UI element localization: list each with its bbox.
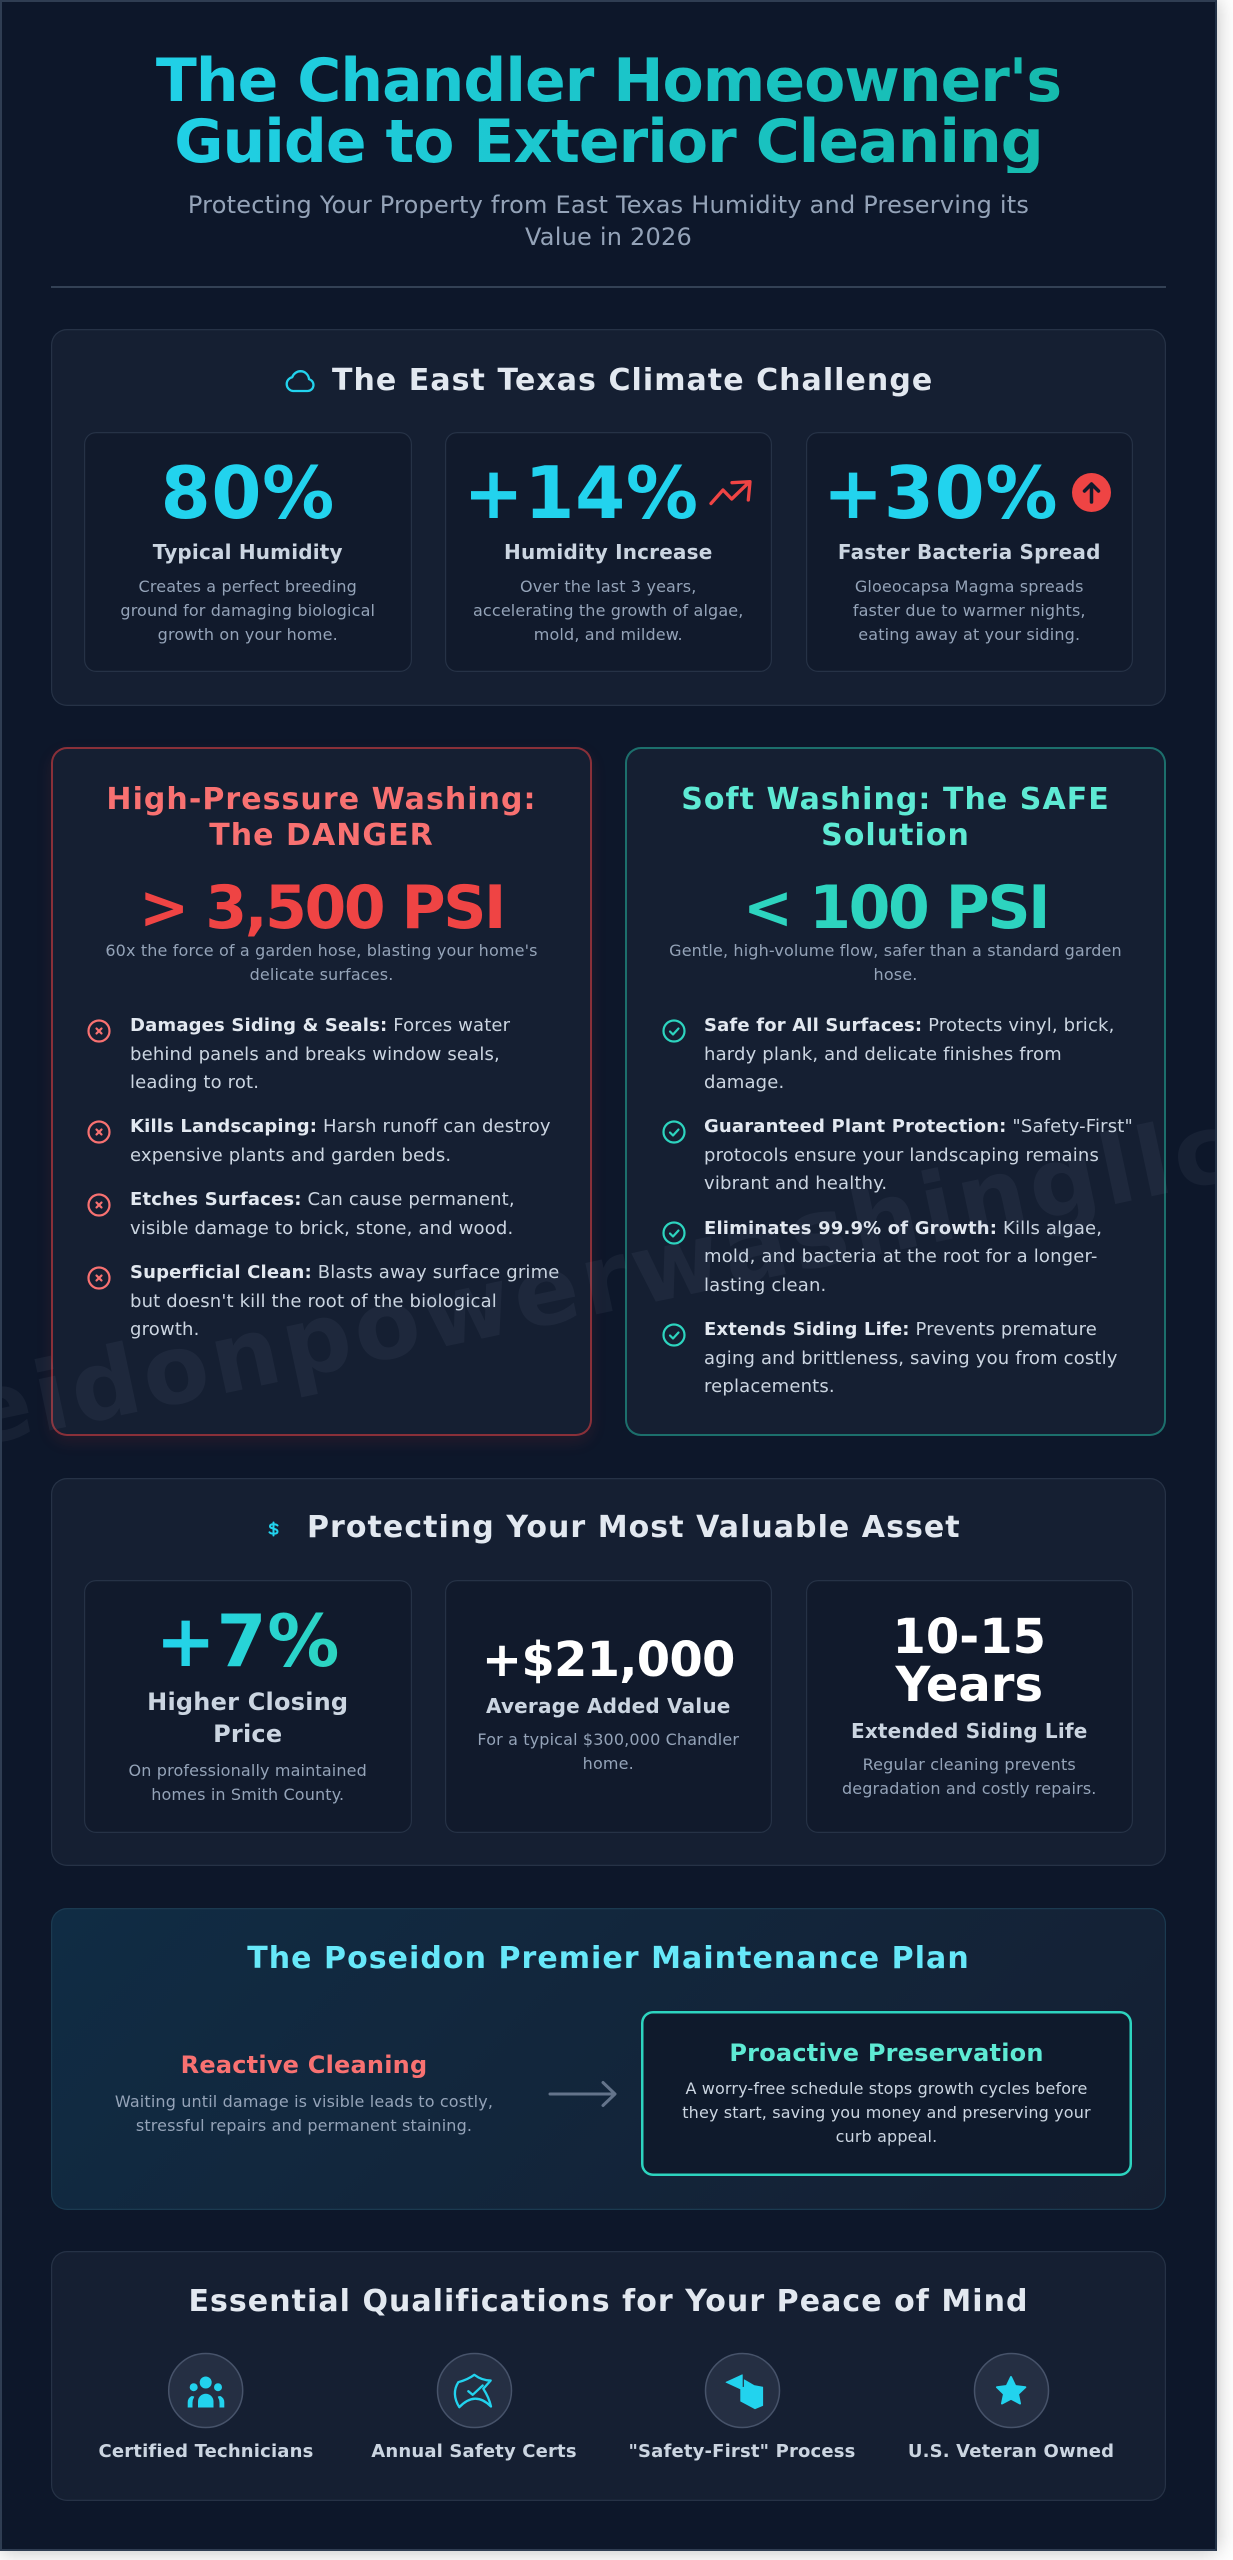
stat card: 10-15 years [806, 1580, 1133, 1833]
benefit: eliminates growth [704, 1218, 1102, 1296]
stat label: Typical Humidity [153, 540, 343, 564]
benefit: eliminates growth: lasting clean. [704, 1274, 826, 1296]
heading: safe [681, 782, 1110, 852]
stat card: +$21,000 [444, 1580, 772, 1833]
reactive description: stressful repairs and permanent staining. [136, 2116, 472, 2134]
heading: danger: The DANGER [209, 818, 434, 852]
PSI description [669, 941, 1122, 984]
stat description [477, 1730, 739, 1773]
stat description: Regular cleaning prevents [863, 1754, 1076, 1774]
icon: trending up [709, 480, 752, 506]
icon: x circle [87, 1019, 111, 1043]
reactive heading: Reactive Cleaning [181, 2050, 427, 2078]
stat label [147, 1688, 348, 1748]
icon: x circle [87, 1193, 111, 1217]
label: safety-first process: "Safety-First" Process [629, 2441, 855, 2462]
heading: climate challenge: The East Texas Climate Challenge [332, 362, 933, 398]
stat description: homes in Smith County. [151, 1785, 344, 1804]
stat description [853, 577, 1086, 644]
subtitle: Protecting Your Property from East Texas Humidity and Preserving its [188, 191, 1029, 219]
stat description: eating away at your siding. [858, 625, 1080, 644]
stat description: degradation and costly repairs. [842, 1778, 1097, 1798]
PSI description [105, 941, 538, 984]
risk: kills landscaping: expensive plants and garden beds. [130, 1144, 451, 1166]
benefit list [662, 1015, 1133, 1397]
icon: check circle [662, 1019, 686, 1043]
risk: kills landscaping: Kills Landscaping: Harsh runoff can destroy [130, 1116, 551, 1137]
stat description [120, 577, 375, 644]
stat description: Over the last 3 years, [520, 577, 696, 596]
icon: up arrow circle [1072, 473, 1111, 512]
risk: damages siding: leading to rot. [130, 1072, 259, 1093]
stat number: Years [895, 1656, 1043, 1712]
proactive description: A worry-free schedule stops growth cycles before [685, 2079, 1088, 2098]
benefit: plant protection: protocols ensure your landscaping remains [704, 1144, 1099, 1166]
heading: danger [106, 782, 537, 852]
heading: safe: Soft Washing: The SAFE [681, 782, 1110, 816]
stat number: 80% [161, 451, 335, 535]
benefit: eliminates growth: mold, and bacteria at the root for a longer- [704, 1246, 1098, 1267]
stat description: ground for damaging biological [120, 601, 375, 620]
stat description: growth on your home. [158, 625, 338, 644]
stat number: +7% [155, 1599, 340, 1683]
risk: etches surfaces: visible damage to brick, stone, and wood. [130, 1218, 513, 1238]
benefit: extends siding life: aging and brittleness, saving you from costly [704, 1348, 1118, 1368]
PSI description: Gentle, high-volume flow, safer than a standard garden [669, 941, 1122, 960]
stat description: mold, and mildew. [534, 625, 683, 644]
benefit: plant protection: vibrant and healthy. [704, 1173, 887, 1194]
label: certified technicians: Certified Technicians [99, 2441, 313, 2462]
icon: check circle [662, 1323, 686, 1347]
panel: maintenance plan [51, 1908, 1166, 2210]
proactive preservation box [641, 2011, 1132, 2176]
icon: x circle [87, 1120, 111, 1144]
icon: annual safety certs [437, 2352, 512, 2428]
risk: damages siding: Damages Siding & Seals: Forces water [130, 1015, 510, 1036]
panel: qualifications [51, 2251, 1166, 2501]
subtitle: Value in 2026 [525, 223, 692, 251]
stat description: On professionally maintained [129, 1761, 367, 1780]
proactive description: curb appeal. [836, 2127, 937, 2146]
risk: superficial clean [130, 1262, 560, 1340]
benefit: plant protection [704, 1116, 1133, 1194]
heading: maintenance plan: The Poseidon Premier Maintenance Plan [247, 1941, 970, 1976]
risk: superficial clean: Superficial Clean: Blasts away surface grime [130, 1262, 560, 1283]
risk: damages siding [130, 1015, 510, 1093]
panel: valuable asset [51, 1478, 1166, 1866]
icon: x circle [87, 1266, 111, 1290]
title: Guide to Exterior Cleaning [174, 107, 1043, 177]
benefit: safe for all surfaces: Safe for All Surfaces: Protects vinyl, brick, [704, 1015, 1114, 1036]
arrow [548, 2080, 616, 2108]
benefit: safe for all surfaces: damage. [704, 1072, 784, 1093]
risk list [87, 1015, 560, 1340]
benefit: plant protection: Guaranteed Plant Protection: "Safety-First" [704, 1116, 1133, 1137]
stat description [129, 1761, 367, 1804]
benefit: eliminates growth: Eliminates 99.9% of Growth: Kills algae, [704, 1218, 1102, 1238]
heading: danger: High-Pressure Washing: [106, 782, 537, 816]
stat description: For a typical $300,000 Chandler [477, 1730, 739, 1749]
PSI value: > 3,500 PSI [139, 873, 504, 943]
proactive heading: Proactive Preservation [729, 2039, 1044, 2067]
risk: superficial clean: growth. [130, 1319, 200, 1340]
heading: qualifications: Essential Qualifications for Your Peace of Mind [188, 2284, 1029, 2319]
PSI description: 60x the force of a garden hose, blasting your home's [105, 941, 538, 960]
panel: high-pressure danger [51, 747, 592, 1436]
stat number: 10-15 [892, 1608, 1046, 1664]
stat description: Creates a perfect breeding [139, 577, 357, 596]
icon: check circle [662, 1120, 686, 1144]
label: annual safety certs: Annual Safety Certs [371, 2441, 577, 2462]
stat card: +7% [84, 1580, 412, 1833]
stat label: Price [213, 1720, 282, 1748]
risk: damages siding: behind panels and breaks window seals, [130, 1044, 500, 1064]
stat number: +30% [823, 451, 1058, 535]
stat label: Extended Siding Life [851, 1718, 1088, 1742]
stat description: home. [583, 1754, 634, 1773]
PSI description: hose. [874, 965, 917, 984]
stat number: +14% [463, 451, 699, 535]
stat label: Average Added Value [486, 1694, 730, 1718]
PSI value: < 100 PSI [743, 873, 1048, 943]
proactive description [682, 2079, 1091, 2146]
label: veteran owned: U.S. Veteran Owned [908, 2441, 1114, 2462]
icon: check circle [662, 1221, 686, 1245]
icon: dollar [268, 1522, 278, 1536]
stat description: Gloeocapsa Magma spreads [855, 577, 1084, 596]
benefit: extends siding life: replacements. [704, 1376, 835, 1397]
stat description: accelerating the growth of algae, [473, 601, 744, 620]
panel: climate challenge [51, 329, 1166, 706]
icon: cloud [286, 370, 315, 392]
PSI description: delicate surfaces. [250, 965, 393, 984]
stat description [473, 577, 744, 644]
heading: valuable asset: Protecting Your Most Valuable Asset [307, 1510, 961, 1545]
title: The Chandler Homeowner's [156, 46, 1061, 116]
benefit: extends siding life [704, 1319, 1118, 1397]
risk: superficial clean: but doesn't kill the root of the biological [130, 1290, 497, 1312]
reactive cleaning block [115, 2050, 493, 2134]
stat number: +$21,000 [482, 1632, 735, 1688]
benefit: safe for all surfaces: hardy plank, and delicate finishes from [704, 1044, 1062, 1064]
risk: etches surfaces [130, 1189, 515, 1238]
icon: safety-first process [705, 2352, 780, 2428]
stat number [892, 1608, 1046, 1712]
reactive description: Waiting until damage is visible leads to costly, [115, 2092, 493, 2110]
icon: certified technicians [168, 2352, 243, 2428]
stat label: Faster Bacteria Spread [838, 540, 1101, 564]
heading: safe: Solution [821, 818, 970, 852]
panel: soft washing safe [625, 747, 1166, 1436]
icon: veteran star [974, 2352, 1049, 2428]
stat description [842, 1754, 1097, 1798]
benefit: extends siding life: Extends Siding Life: Prevents premature [704, 1319, 1097, 1340]
subtitle [188, 191, 1029, 251]
benefit: safe for all surfaces [704, 1015, 1114, 1093]
risk: etches surfaces: Etches Surfaces: Can cause permanent, [130, 1189, 515, 1210]
stat card: +30% [806, 432, 1133, 672]
stat label: Humidity Increase [504, 540, 712, 564]
stat description: faster due to warmer nights, [853, 601, 1086, 620]
reactive description [115, 2092, 493, 2134]
stat card: +14% [444, 432, 772, 672]
stat label: Higher Closing [147, 1688, 348, 1716]
stat card: 80% [84, 432, 412, 672]
proactive description: they start, saving you money and preserving your [682, 2103, 1091, 2122]
title [51, 51, 1166, 173]
risk: kills landscaping [130, 1116, 551, 1166]
